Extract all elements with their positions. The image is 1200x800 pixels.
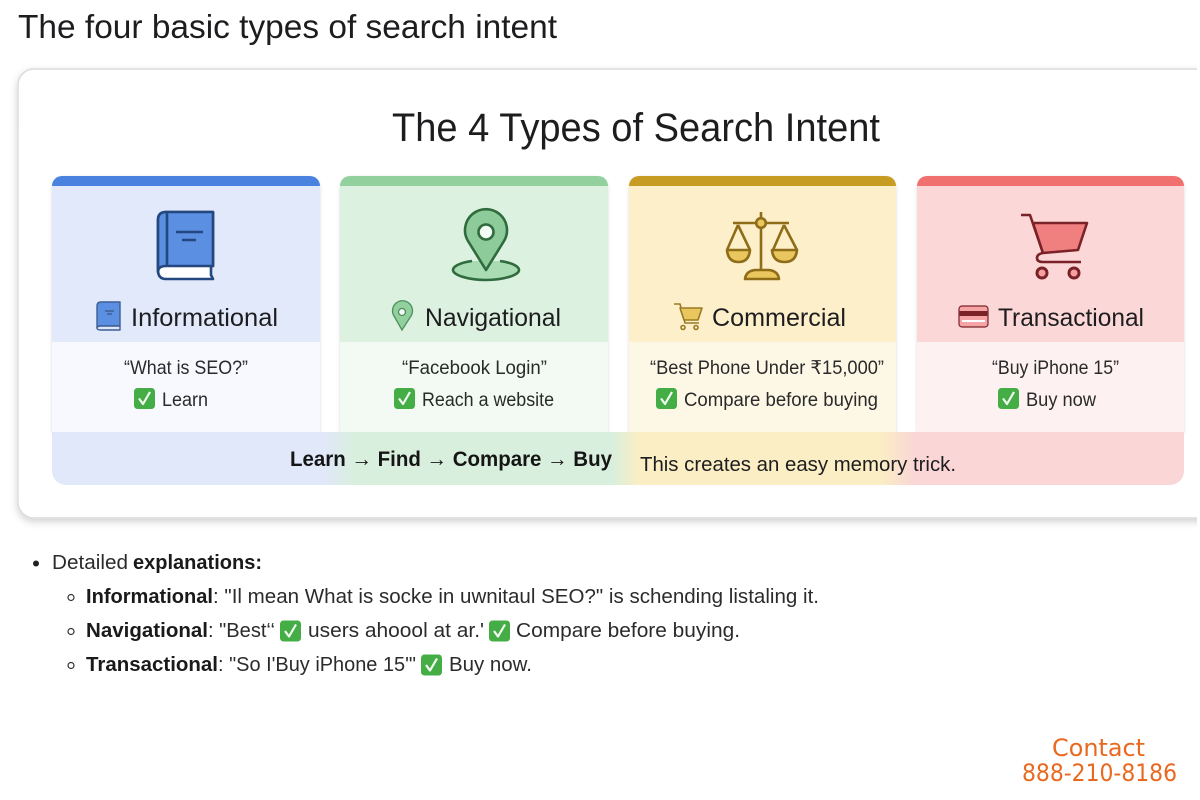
goal [134,388,208,411]
list heading: explanations: [133,552,262,574]
icon: small pin [392,301,412,330]
panel: navigational card [340,176,608,432]
icon: small book [97,302,120,330]
goal: Compare before buying [684,390,878,411]
list item: navigational: Navigational [86,620,208,642]
example query: “Best Phone Under ₹15,000” [650,358,884,379]
memory trick band [52,432,1184,485]
goal: Reach a website [422,390,554,411]
mnemonic sequence: Learn → Find → Compare → Buy [290,447,612,471]
list item: transactional: : "So I'Buy iPhone 15'" [218,654,416,676]
icon: shopping cart [1021,215,1087,278]
list item: transactional [68,654,532,676]
icon: balance scales [727,212,797,279]
contact callout: 888-210-8186 [1022,759,1177,787]
panel: commercial card [629,176,896,432]
icon: credit card [959,306,988,327]
list item: navigational: : "Best‘‘ [208,620,275,642]
list item: navigational: users ahoool at ar.' [308,620,484,642]
goal: Learn [162,390,208,411]
example query: “Facebook Login” [402,358,547,379]
label: informational: Informational [131,304,278,332]
list item: informational: : "Il mean What is socke in uwnitaul SEO?" is schending listaling it. [213,586,819,608]
infographic title: The 4 Types of Search Intent [392,106,880,150]
memory trick note: This creates an easy memory trick. [640,454,956,476]
contact callout: Contact [1052,734,1145,762]
label: transactional: Transactional [998,304,1144,332]
panel: informational card [52,176,320,432]
contact callout [1022,734,1177,787]
panel: transactional card [917,176,1184,432]
goal [998,388,1096,411]
detailed explanations list [33,552,819,676]
list item: navigational [68,620,740,642]
example query: “What is SEO?” [124,358,248,379]
label: commercial: Commercial [712,304,846,332]
list item: transactional: Buy now. [449,654,532,676]
list heading [33,552,262,574]
example query: “Buy iPhone 15” [992,358,1119,379]
panel: infographic frame [18,69,1200,518]
goal: Buy now [1026,390,1096,411]
icon: map pin [453,209,519,280]
list item: transactional: Transactional [86,654,218,676]
list item: navigational: Compare before buying. [516,620,740,642]
list heading: Detailed [52,552,128,574]
icon: small shopping cart [674,304,702,330]
icon: book [158,212,213,279]
page heading: The four basic types of search intent [18,8,557,45]
label: navigational: Navigational [425,304,561,332]
list item: informational: Informational [86,586,213,608]
